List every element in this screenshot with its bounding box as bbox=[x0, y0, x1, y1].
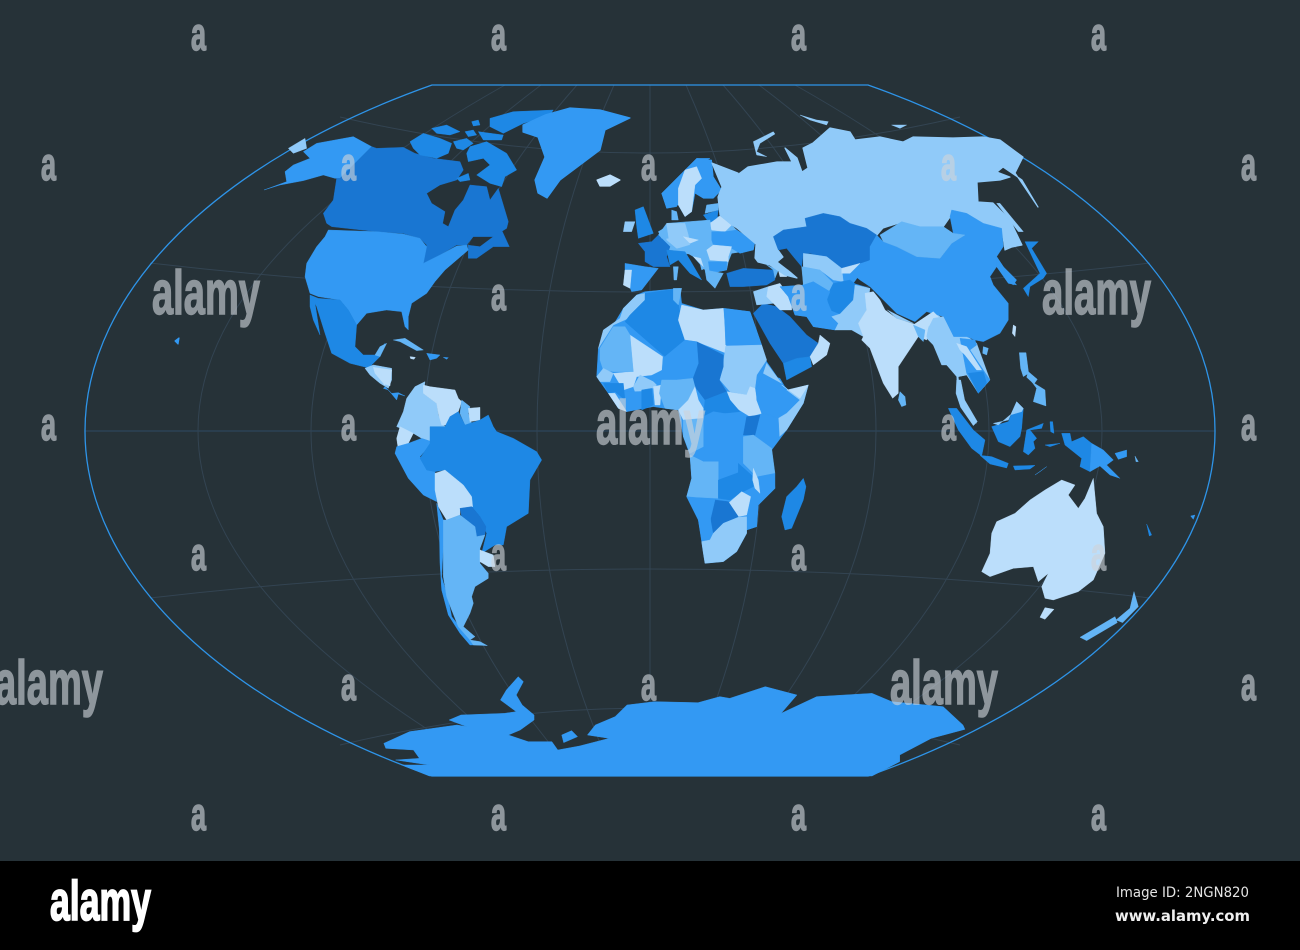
watermark row 2: a bbox=[41, 138, 56, 190]
Moluccas bbox=[1050, 422, 1054, 433]
Central African Republic bbox=[703, 392, 740, 417]
United Kingdom bbox=[635, 207, 653, 238]
watermark row 4: a bbox=[41, 398, 56, 450]
watermark row 4: a bbox=[941, 398, 956, 450]
Croatia bbox=[693, 257, 703, 267]
Kazakhstan bbox=[773, 213, 877, 268]
Malay peninsula bbox=[956, 380, 977, 426]
watermark row 3: a bbox=[791, 268, 806, 320]
Somaliland bbox=[782, 385, 808, 398]
Mongolia bbox=[880, 222, 965, 258]
watermark row 2: a bbox=[941, 138, 956, 190]
Uganda bbox=[743, 415, 760, 435]
Antarctic island bbox=[562, 731, 578, 743]
Uzbekistan bbox=[803, 253, 843, 282]
Sumatra bbox=[948, 408, 985, 456]
Mauritania bbox=[600, 327, 633, 372]
Korea bbox=[997, 257, 1017, 285]
Vietnam bbox=[960, 338, 990, 393]
Egypt bbox=[724, 308, 762, 345]
watermark row 5: a bbox=[1091, 528, 1106, 580]
watermark row 4: a bbox=[1241, 398, 1256, 450]
Alpine states bbox=[673, 243, 708, 254]
continent: Oceania bbox=[948, 380, 1195, 641]
Venezuela bbox=[423, 385, 462, 425]
watermark row 7 bbox=[191, 788, 1106, 840]
Kenya bbox=[753, 413, 779, 448]
watermark row 5 bbox=[191, 528, 1106, 580]
Hainan bbox=[983, 347, 988, 355]
Madagascar bbox=[782, 478, 806, 530]
Namibia bbox=[687, 497, 715, 540]
watermark row 4: a bbox=[341, 398, 356, 450]
Chukotka tip bbox=[288, 138, 307, 153]
Norway bbox=[662, 158, 710, 208]
Bulgaria bbox=[708, 262, 727, 273]
New Guinea, Indonesian side bbox=[1062, 433, 1092, 472]
watermark row 6: a bbox=[341, 658, 356, 710]
Brazil bbox=[420, 412, 542, 553]
Benin bbox=[653, 385, 662, 405]
Iraq bbox=[767, 283, 792, 310]
watermark row 3: alamy bbox=[152, 259, 260, 328]
Nigeria bbox=[659, 378, 695, 410]
Latvia and Lithuania bbox=[703, 210, 718, 222]
Kyrgyzstan bbox=[842, 263, 860, 273]
Arctic island bbox=[892, 125, 907, 128]
watermark row 6: a bbox=[641, 658, 656, 710]
Novaya Zemlya bbox=[753, 132, 775, 157]
Botswana bbox=[711, 500, 738, 533]
Timor bbox=[1045, 443, 1060, 447]
watermark row 2: a bbox=[641, 138, 656, 190]
Romania bbox=[707, 245, 732, 262]
Java bbox=[980, 455, 1008, 468]
Italy bbox=[667, 250, 702, 280]
graticule bbox=[85, 85, 1215, 776]
Ecuador bbox=[397, 427, 413, 450]
Algeria bbox=[625, 288, 685, 357]
Sweden bbox=[678, 167, 702, 217]
Saudi Arabia bbox=[753, 303, 818, 363]
Czechia bbox=[683, 237, 698, 243]
Peru bbox=[395, 438, 437, 502]
Benelux bbox=[658, 227, 668, 238]
watermark row 2: a bbox=[341, 138, 356, 190]
Caribbean islands bbox=[393, 338, 448, 360]
Argentina bbox=[443, 515, 488, 640]
watermark row 1: a bbox=[791, 8, 806, 60]
Africa base bbox=[597, 288, 808, 563]
Bangladesh bbox=[913, 325, 925, 342]
continent: Antarctica bbox=[384, 677, 965, 776]
Tasmania bbox=[1040, 608, 1054, 619]
Mali bbox=[613, 335, 663, 390]
Afghanistan bbox=[827, 280, 857, 314]
central Europe base bbox=[658, 216, 755, 273]
watermark row 5: a bbox=[791, 528, 806, 580]
Burkina Faso bbox=[633, 375, 657, 392]
Finland bbox=[695, 160, 722, 198]
watermark row 5: a bbox=[491, 528, 506, 580]
watermark row 3: alamy bbox=[1042, 259, 1151, 328]
watermark row 2: a bbox=[1241, 138, 1256, 190]
watermark row 7: a bbox=[491, 788, 506, 840]
Paraguay bbox=[460, 507, 486, 537]
DR Congo bbox=[703, 412, 753, 480]
South Africa bbox=[702, 517, 747, 563]
continent: Africa and Arabia bbox=[597, 288, 830, 563]
Zambia bbox=[718, 463, 753, 500]
Colombia bbox=[397, 382, 445, 442]
Hawaii bbox=[175, 338, 179, 344]
Ukraine bbox=[712, 230, 755, 253]
South Sudan bbox=[727, 387, 762, 417]
watermark row 1 bbox=[191, 8, 1106, 60]
website: www.alamy.com bbox=[1115, 907, 1250, 925]
Ghana bbox=[642, 388, 653, 410]
watermark row 1: a bbox=[191, 8, 206, 60]
Tierra del Fuego bbox=[470, 640, 487, 646]
Lesser Sunda islands bbox=[1013, 465, 1047, 475]
Oman bbox=[810, 335, 830, 365]
USA bbox=[305, 230, 468, 330]
watermark row 7: a bbox=[791, 788, 806, 840]
Uruguay bbox=[480, 550, 495, 567]
watermark row 2 bbox=[41, 138, 1256, 190]
watermark row 7: a bbox=[1091, 788, 1106, 840]
Canadian Arctic islands bbox=[410, 110, 553, 187]
Somalia bbox=[778, 385, 808, 437]
watermark row 6: alamy bbox=[890, 649, 998, 718]
Sulawesi bbox=[1023, 423, 1043, 455]
Libya bbox=[678, 305, 727, 353]
Morocco bbox=[598, 293, 645, 348]
Greenland bbox=[523, 108, 630, 198]
Guinea bbox=[603, 383, 625, 400]
Nepal bbox=[887, 310, 913, 323]
watermark row 6: alamy bbox=[0, 649, 103, 718]
Sri Lanka bbox=[898, 392, 906, 407]
Azerbaijan bbox=[778, 270, 788, 277]
Belarus bbox=[710, 216, 732, 232]
Yemen bbox=[783, 357, 812, 380]
France bbox=[638, 235, 670, 267]
Southeast Asia base bbox=[913, 312, 990, 393]
Ireland bbox=[623, 222, 635, 232]
Panama bbox=[383, 387, 405, 400]
northeast India bbox=[913, 312, 940, 340]
Ivory Coast bbox=[625, 392, 642, 412]
image id: Image ID: 2NGN820 bbox=[1116, 885, 1249, 901]
Philippines bbox=[1019, 353, 1046, 406]
Laos bbox=[957, 343, 982, 370]
New Britain bbox=[1115, 450, 1127, 459]
Taiwan bbox=[1012, 325, 1016, 337]
Niger bbox=[652, 340, 698, 382]
Turkmenistan bbox=[802, 267, 833, 292]
Costa Rica bbox=[380, 370, 392, 385]
Estonia bbox=[705, 203, 718, 213]
Ethiopia bbox=[757, 373, 800, 415]
Chile bbox=[437, 503, 480, 645]
Portugal bbox=[623, 270, 632, 288]
Cameroon bbox=[678, 387, 703, 420]
China bbox=[852, 210, 1017, 342]
central Asia base bbox=[780, 253, 870, 330]
Papua New Guinea bbox=[1090, 443, 1120, 478]
Svalbard bbox=[800, 115, 828, 125]
watermark row 5: a bbox=[191, 528, 206, 580]
Angola bbox=[687, 455, 718, 498]
New Zealand south bbox=[1080, 617, 1117, 641]
continent: Asia bbox=[773, 125, 1047, 423]
Caucasus bbox=[767, 265, 778, 278]
Tunisia bbox=[673, 288, 682, 305]
Eritrea bbox=[763, 363, 782, 383]
watermark row 4: alamy bbox=[596, 389, 705, 458]
watermark row 7: a bbox=[191, 788, 206, 840]
watermark row 3 bbox=[152, 259, 1151, 328]
watermark row 1: a bbox=[1091, 8, 1106, 60]
continent: South America bbox=[380, 370, 542, 646]
Turkey bbox=[727, 268, 775, 287]
Guyana bbox=[460, 400, 472, 425]
Alaska bbox=[264, 137, 372, 190]
Tanzania bbox=[743, 435, 775, 477]
Sudan bbox=[720, 345, 767, 395]
watermark row 6 bbox=[0, 649, 1256, 718]
map frame outline bbox=[85, 85, 1215, 776]
India bbox=[858, 292, 918, 398]
Chad bbox=[693, 342, 727, 400]
Australia bbox=[982, 478, 1105, 600]
Bolivia bbox=[435, 470, 473, 520]
Thailand bbox=[947, 350, 977, 423]
Mozambique bbox=[747, 473, 775, 530]
Spain bbox=[625, 263, 658, 292]
Suriname bbox=[468, 407, 480, 422]
Japan bbox=[1023, 242, 1047, 297]
watermark row 6: a bbox=[1241, 658, 1256, 710]
Central America bbox=[365, 343, 392, 388]
watermark row 1: a bbox=[491, 8, 506, 60]
Solomon Islands bbox=[1135, 456, 1138, 462]
Sakhalin bbox=[997, 203, 1023, 232]
Germany bbox=[667, 223, 690, 248]
Senegal bbox=[597, 368, 613, 382]
Iceland bbox=[597, 175, 620, 186]
Mexico bbox=[310, 295, 385, 368]
Russia bbox=[712, 128, 1038, 278]
Zimbabwe bbox=[728, 492, 751, 517]
footer logo: alamy bbox=[50, 869, 151, 932]
Scandinavia base bbox=[662, 158, 722, 217]
watermark row 4 bbox=[41, 389, 1256, 458]
Sabah bbox=[993, 402, 1023, 425]
Fiji bbox=[1191, 515, 1195, 519]
continent: Europe bbox=[623, 115, 828, 310]
Sardinia bbox=[673, 267, 678, 280]
New Caledonia bbox=[1147, 524, 1152, 536]
Borneo bbox=[992, 402, 1023, 447]
Greece bbox=[705, 270, 723, 288]
Syria and Jordan bbox=[753, 287, 775, 305]
Gabon and Congo bbox=[683, 418, 703, 453]
watermark row 3: a bbox=[491, 268, 506, 320]
Liberia bbox=[608, 393, 627, 412]
Poland bbox=[687, 220, 712, 242]
continent: North America bbox=[264, 110, 553, 388]
Malawi bbox=[753, 468, 760, 493]
Denmark bbox=[672, 210, 678, 220]
Cambodia bbox=[968, 372, 987, 393]
Serbia bbox=[698, 257, 708, 270]
Iran bbox=[780, 282, 838, 330]
Pakistan bbox=[832, 285, 870, 337]
Myanmar bbox=[927, 317, 955, 365]
New Zealand north bbox=[1116, 592, 1138, 623]
Canada bbox=[323, 147, 509, 263]
footer band bbox=[0, 861, 1300, 950]
